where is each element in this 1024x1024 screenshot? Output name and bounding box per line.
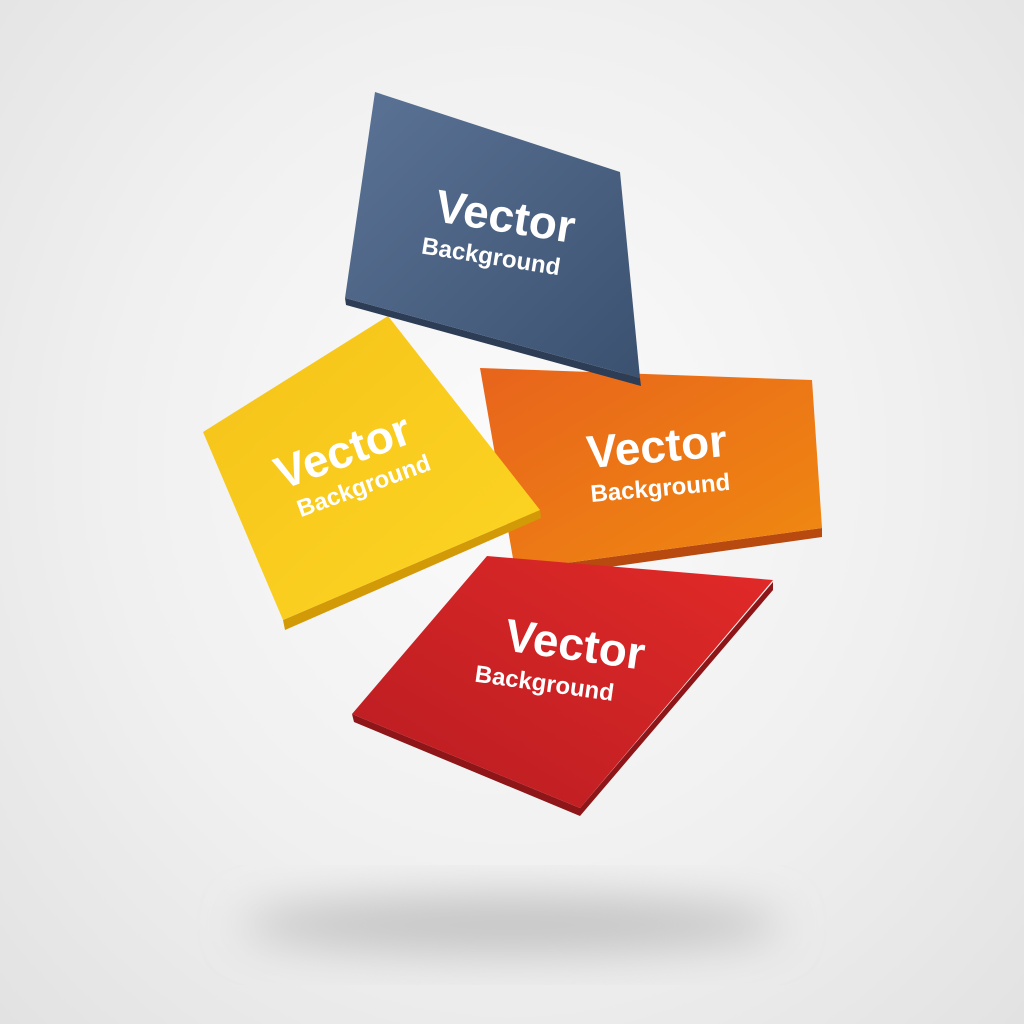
- text: red card: Vector: [502, 609, 649, 680]
- text: blue card: [420, 178, 579, 283]
- floor shadow: [242, 895, 782, 955]
- text: yellow card: [268, 400, 434, 526]
- card: blue: [345, 92, 641, 386]
- text: red card: [473, 605, 649, 710]
- text: red card: Background: [473, 661, 616, 707]
- text: blue card: Background: [420, 233, 562, 281]
- text: blue card: Vector: [432, 180, 579, 253]
- text: yellow card: Background: [293, 450, 434, 523]
- text: orange card: Vector: [584, 414, 729, 478]
- text: yellow card: Vector: [268, 402, 418, 499]
- text: orange card: [584, 414, 732, 508]
- card: orange: [480, 368, 822, 580]
- card: yellow: [203, 316, 541, 630]
- card: red: [352, 556, 773, 816]
- text: orange card: Background: [589, 469, 731, 508]
